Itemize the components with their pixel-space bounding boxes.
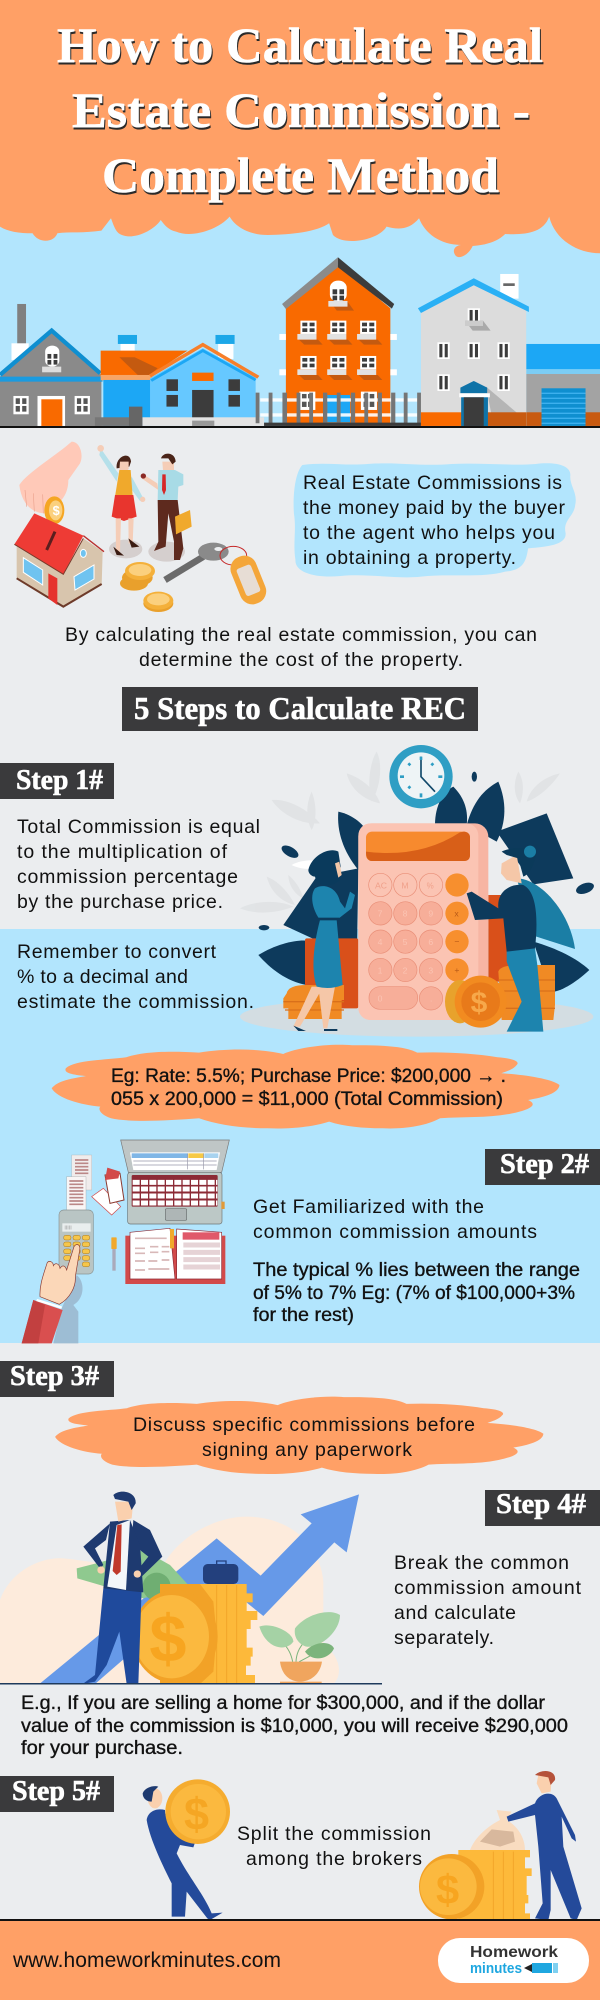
logo: Homework <box>470 1944 558 1961</box>
illustration: house, hand, buyers and key <box>14 442 270 612</box>
step 1 text: by the purchase price. <box>17 891 223 913</box>
key labels <box>375 880 459 1004</box>
illustration: man with money bag and coins <box>419 1771 582 1920</box>
step 3 badge <box>0 1361 114 1397</box>
blue house <box>95 335 264 426</box>
calculator <box>358 823 488 1020</box>
dollar coin: $ <box>471 987 488 1020</box>
website address: www.homeworkminutes.com <box>12 1949 281 1972</box>
white leaves <box>292 860 330 869</box>
step 3 cloud: Discuss specific commissions before <box>133 1414 475 1436</box>
footer band <box>0 1919 600 2000</box>
title <box>57 17 543 203</box>
step 4 text: commission amount <box>394 1577 582 1599</box>
step 5 badge <box>0 1776 114 1812</box>
potted plant <box>259 1612 340 1684</box>
open ledger <box>125 1228 225 1284</box>
key labels: − <box>454 936 459 946</box>
key labels: 3 <box>428 965 433 975</box>
key labels: + <box>454 965 459 975</box>
key labels: 4 <box>378 937 383 947</box>
logo <box>438 1938 589 1983</box>
peach backdrop <box>0 1517 339 1684</box>
intro paragraph: By calculating the real estate commission, you can <box>65 624 537 646</box>
step 4 text: Break the common <box>394 1552 569 1574</box>
man <box>467 846 543 1032</box>
step 1 badge: Step 1# <box>16 765 103 796</box>
receipts and notes <box>67 1155 124 1215</box>
background leaves <box>240 752 560 913</box>
blue section background <box>0 929 600 1343</box>
step 4 text: and calculate <box>394 1602 516 1624</box>
logo: minutes <box>470 1960 522 1977</box>
example cloud: 055 x 200,000 = $11,000 (Total Commission) <box>111 1088 503 1110</box>
hand with coin <box>19 442 82 524</box>
illustration: calculator with two people <box>240 745 595 1037</box>
step 2 badge: Step 2# <box>500 1149 589 1180</box>
key labels: 8 <box>403 909 408 919</box>
businessman <box>83 1492 162 1684</box>
title: Estate Commission - <box>72 82 530 138</box>
definition bubble: the money paid by the buyer <box>303 497 566 519</box>
definition bubble <box>294 463 576 577</box>
grey house <box>0 304 103 426</box>
step 1 text: commission percentage <box>17 866 238 888</box>
garage <box>526 344 600 426</box>
fence <box>256 393 421 426</box>
step 1 text: Remember to convert <box>17 941 217 963</box>
step 2 text: of 5% to 7% Eg: (7% of $100,000+3% <box>253 1282 575 1304</box>
laptop <box>121 1140 229 1224</box>
orange house <box>279 257 397 426</box>
key labels: 1 <box>378 965 383 975</box>
step 4 text: separately. <box>394 1627 494 1649</box>
title: How to Calculate Real <box>57 17 543 73</box>
key labels: M <box>401 880 409 890</box>
step 1 text <box>17 816 260 1013</box>
man with briefcase <box>141 454 192 562</box>
hand with coin: $ <box>53 504 60 518</box>
piggy bank house <box>14 513 104 607</box>
illustration: row of houses <box>0 257 600 426</box>
step 4 badge <box>485 1489 600 1526</box>
definition bubble: to the agent who helps you <box>303 522 555 544</box>
dollar coin <box>445 976 507 1028</box>
card machine: IIIII <box>64 1225 72 1231</box>
intro paragraph <box>65 624 537 671</box>
step 1 text: estimate the commission. <box>17 991 254 1013</box>
step 2 text: for the rest) <box>253 1304 354 1326</box>
key labels: 2 <box>403 965 408 975</box>
step 1 badge <box>0 763 114 799</box>
heading: 5 steps: 5 Steps to Calculate REC <box>134 690 466 726</box>
step 2 text: Get Familiarized with the <box>253 1196 484 1218</box>
dark leaves <box>258 772 595 992</box>
intro paragraph: determine the cost of the property. <box>139 649 463 671</box>
definition bubble: in obtaining a property. <box>303 547 516 569</box>
step 2 text: The typical % lies between the range <box>253 1259 580 1281</box>
floor line <box>0 1683 382 1684</box>
ground line <box>0 426 600 428</box>
step 3 cloud <box>55 1397 543 1474</box>
rising arrow <box>39 1494 359 1684</box>
key labels: 6 <box>428 937 433 947</box>
step 4 badge: Step 4# <box>496 1489 586 1520</box>
key and tag <box>165 543 270 608</box>
briefcase <box>203 1561 238 1584</box>
step 2 text: common commission amounts <box>253 1221 537 1243</box>
key labels: x <box>454 909 459 919</box>
key labels: 7 <box>378 909 383 919</box>
step 4 text <box>394 1552 582 1649</box>
key labels: AC <box>375 880 387 890</box>
definition bubble: Real Estate Commissions is <box>303 472 562 494</box>
key labels: 5 <box>403 937 408 947</box>
step 5 text <box>237 1823 431 1870</box>
step 1 text: % to a decimal and <box>17 966 188 988</box>
step 4 example: E.g., If you are selling a home for $300,000, and if the dollar <box>21 1692 546 1714</box>
illustration: man with money bag and coins: $ <box>436 1866 459 1913</box>
header cloud <box>0 0 600 257</box>
wall clock <box>389 745 453 808</box>
illustration: businessman with coins and rising arrow <box>0 1492 359 1684</box>
key labels: 9 <box>428 909 433 919</box>
woman <box>293 850 355 1031</box>
step 4 example: value of the commission is $10,000, you will receive $290,000 <box>21 1715 568 1737</box>
key labels: . <box>430 994 432 1004</box>
step 3 cloud: signing any paperwork <box>202 1439 412 1461</box>
gold coins <box>120 562 173 612</box>
step 1 text: Total Commission is equal <box>17 816 260 838</box>
step 5 text: Split the commission <box>237 1823 431 1845</box>
pointing hand <box>22 1244 83 1343</box>
step 3 badge: Step 3# <box>10 1361 99 1392</box>
step 4 example: for your purchase. <box>21 1737 183 1759</box>
illustration: laptop, ledger and calculator <box>22 1140 229 1343</box>
teal leaf <box>517 878 575 949</box>
woman <box>97 445 145 558</box>
ground shadow <box>240 997 593 1037</box>
example cloud <box>52 1045 560 1129</box>
step 5 badge: Step 5# <box>12 1776 100 1807</box>
example cloud: Eg: Rate: 5.5%; Purchase Price: $200,000 → . <box>111 1065 506 1087</box>
illustration: man carrying coin: $ <box>184 1788 209 1839</box>
title: Complete Method <box>102 147 499 203</box>
coin stacks behind <box>283 895 555 1020</box>
coin stack: $ <box>149 1603 186 1677</box>
step 1 text: to the multiplication of <box>17 841 228 863</box>
step 2 badge <box>485 1149 600 1185</box>
key labels: 0 <box>378 994 383 1004</box>
coin stack <box>132 1584 257 1684</box>
step 2 text <box>253 1196 580 1326</box>
step 4 example <box>21 1692 568 1759</box>
sky background <box>0 180 600 427</box>
card machine <box>59 1210 93 1274</box>
banknotes <box>77 1550 188 1601</box>
key labels: % <box>427 881 434 890</box>
illustration: man carrying coin <box>143 1779 230 1920</box>
pen <box>111 1237 117 1271</box>
white house <box>418 274 529 426</box>
step 5 text: among the brokers <box>246 1848 422 1870</box>
